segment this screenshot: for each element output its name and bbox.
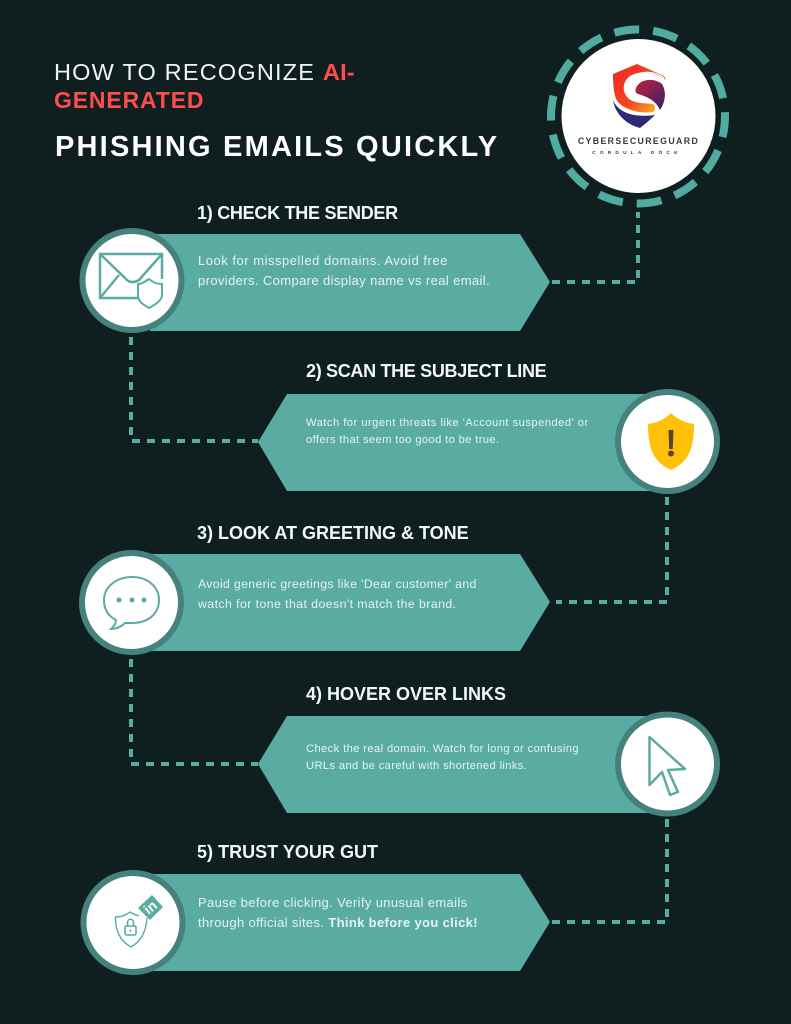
body 5: through official sites. Think before you click! <box>198 915 478 930</box>
title line 2: GENERATED <box>54 87 204 113</box>
body 5 <box>198 895 478 930</box>
logo subtitle: CORDULA DÖCK <box>592 149 682 156</box>
body 4: URLs and be careful with shortened links. <box>306 760 527 772</box>
step 5 banner <box>150 874 550 971</box>
icon: envelope with shield <box>82 231 182 330</box>
heading 1: 1) CHECK THE SENDER <box>197 203 398 223</box>
body 1 <box>198 253 490 288</box>
body 3: Avoid generic greetings like 'Dear customer' and <box>198 577 477 591</box>
body 2: Watch for urgent threats like 'Account suspended' or <box>306 417 589 429</box>
body 4: Check the real domain. Watch for long or confusing <box>306 743 579 755</box>
heading 3: 3) LOOK AT GREETING & TONE <box>197 523 469 543</box>
title line 3: PHISHING EMAILS QUICKLY <box>55 131 499 163</box>
title <box>54 59 499 163</box>
step 2 banner <box>258 394 650 491</box>
icon: lock shield with linkedin tag <box>84 873 182 972</box>
connector: step 3 to step 4 <box>131 659 258 764</box>
icon: mouse cursor <box>618 714 717 814</box>
heading 5: 5) TRUST YOUR GUT <box>197 842 378 862</box>
connector: step 2 to step 3 <box>556 497 667 602</box>
heading 4: 4) HOVER OVER LINKS <box>306 684 506 704</box>
step 1 banner <box>150 234 550 331</box>
body 4 <box>306 743 579 772</box>
icon: shield logo <box>613 64 666 128</box>
icon: lock shield with linkedin tag: in <box>140 897 160 917</box>
body 2 <box>306 417 589 446</box>
body 1: Look for misspelled domains. Avoid free <box>198 253 448 268</box>
connector: logo to step 1 <box>552 212 638 282</box>
body 5: Pause before clicking. Verify unusual emails <box>198 895 467 910</box>
icon: speech bubble <box>82 553 181 652</box>
body 3: watch for tone that doesn't match the brand. <box>198 596 456 610</box>
logo badge <box>531 9 745 224</box>
icon: warning shield <box>618 392 717 491</box>
connector: step 1 to step 2 <box>131 337 258 441</box>
body 1: providers. Compare display name vs real email. <box>198 273 490 288</box>
body 3 <box>198 577 477 610</box>
title line 1: HOW TO RECOGNIZE AI- <box>54 59 355 85</box>
heading 2: 2) SCAN THE SUBJECT LINE <box>306 361 546 381</box>
connector: step 4 to step 5 <box>552 819 667 922</box>
step 3 banner <box>150 554 550 651</box>
logo wordmark: CYBERSECUREGUARD <box>578 136 699 146</box>
body 2: offers that seem too good to be true. <box>306 434 499 446</box>
step 4 banner <box>258 716 650 813</box>
